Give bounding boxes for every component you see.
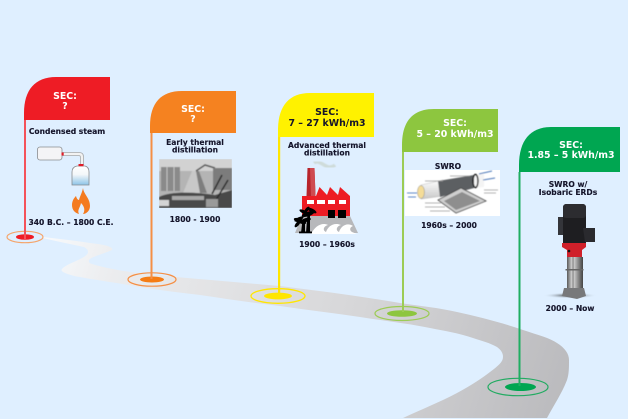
flag: SEC unknown (orange) [150, 91, 236, 133]
heading [166, 138, 224, 154]
heading: SWRO [435, 162, 462, 171]
flag: SEC 5-20 (lime): 5 – 20 kWh/m3 [416, 129, 494, 140]
date: 1800 - 1900 [170, 215, 220, 224]
heading: Condensed steam [29, 127, 105, 136]
flag: SEC 1.85-5 (green): SEC: [559, 140, 583, 151]
milestone 5: SWRO with isobaric ERDs [488, 127, 620, 396]
flag: SEC unknown (red): SEC: [53, 91, 77, 102]
date: 1900 – 1960s [299, 240, 355, 249]
flag: SEC 5-20 (lime): SEC: [443, 118, 467, 129]
diagram: membrane module [405, 170, 500, 216]
heading: Isobaric ERDs [539, 188, 598, 197]
flag: SEC unknown (red) [24, 77, 110, 120]
flag: SEC 1.85-5 (green) [519, 127, 620, 172]
pole and ring marker [251, 137, 305, 303]
date: 340 B.C. – 1800 C.E. [28, 218, 114, 227]
flag: SEC unknown (red): ? [62, 101, 68, 112]
pole and ring marker [7, 120, 43, 243]
heading [539, 180, 598, 197]
photo: distillation plant [159, 159, 232, 208]
date: 2000 – Now [546, 304, 594, 313]
flag: SEC 7-27 (yellow): SEC: [315, 107, 339, 118]
milestone 2: early thermal distillation [128, 91, 236, 286]
flag: SEC 7-27 (yellow) [278, 93, 374, 137]
winding road [43, 237, 569, 418]
icon: pump [543, 204, 597, 299]
pole and ring marker [128, 133, 176, 286]
icon: distillation vessels [38, 147, 89, 185]
heading: distillation [172, 146, 218, 154]
flag: SEC 7-27 (yellow): 7 – 27 kWh/m3 [288, 118, 366, 129]
heading: distillation [304, 148, 350, 158]
icon: factory by the sea [293, 162, 358, 234]
heading: SWRO w/ [549, 180, 588, 189]
milestone 4: SWRO [375, 109, 500, 320]
heading [288, 141, 366, 158]
flag: SEC unknown (orange): ? [190, 114, 196, 125]
flag: SEC 5-20 (lime) [402, 109, 498, 152]
date: 1960s – 2000 [421, 221, 477, 230]
milestone 3: advanced thermal distillation [251, 93, 374, 303]
flag: SEC 1.85-5 (green): 1.85 – 5 kWh/m3 [527, 150, 615, 161]
flag: SEC unknown (orange): SEC: [181, 104, 205, 115]
icon: flame [72, 188, 90, 214]
pole and ring marker [375, 152, 429, 320]
milestone 1: condensed steam [7, 77, 114, 243]
heading: Early thermal [166, 138, 224, 147]
pole and ring marker [488, 172, 548, 396]
heading: Advanced thermal [288, 141, 366, 150]
icon: palm trees [293, 206, 317, 233]
